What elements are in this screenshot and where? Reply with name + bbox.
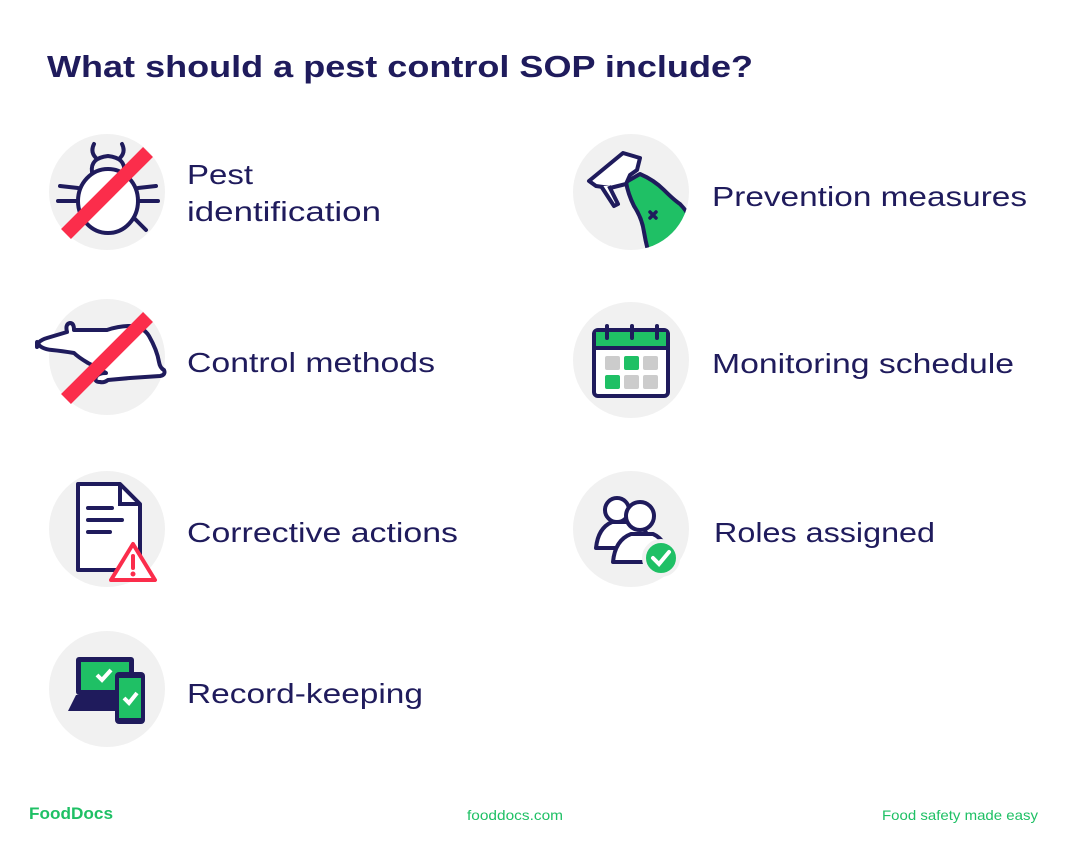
title: What should a pest control SOP include? — [47, 49, 753, 84]
item: pest identification — [49, 134, 381, 250]
label: identification — [187, 196, 381, 227]
footer: tagline: Food safety made easy — [882, 807, 1038, 823]
label: Record-keeping — [187, 678, 423, 709]
icon: calendar — [573, 302, 689, 418]
item: control methods — [37, 299, 435, 415]
label: Roles assigned — [714, 517, 935, 548]
label: Corrective actions — [187, 517, 458, 548]
icon: people with check — [573, 471, 689, 587]
item: monitoring schedule — [573, 302, 1014, 418]
item: corrective actions — [49, 471, 458, 587]
item: roles assigned — [573, 471, 935, 587]
footer: logo: FoodDocs — [29, 804, 113, 823]
icon: rat crossed — [37, 299, 165, 415]
icon: bug crossed — [49, 134, 165, 250]
label: Control methods — [187, 347, 435, 378]
label: Prevention measures — [712, 181, 1027, 212]
icon: spray bottle — [573, 134, 690, 258]
label: Monitoring schedule — [712, 348, 1014, 379]
label: Pest — [187, 159, 253, 190]
icon: laptop and phone — [49, 631, 165, 747]
item: prevention measures — [573, 134, 1027, 258]
footer: url: fooddocs.com — [467, 807, 563, 823]
item: record-keeping — [49, 631, 423, 747]
icon: document with warning — [49, 471, 165, 587]
